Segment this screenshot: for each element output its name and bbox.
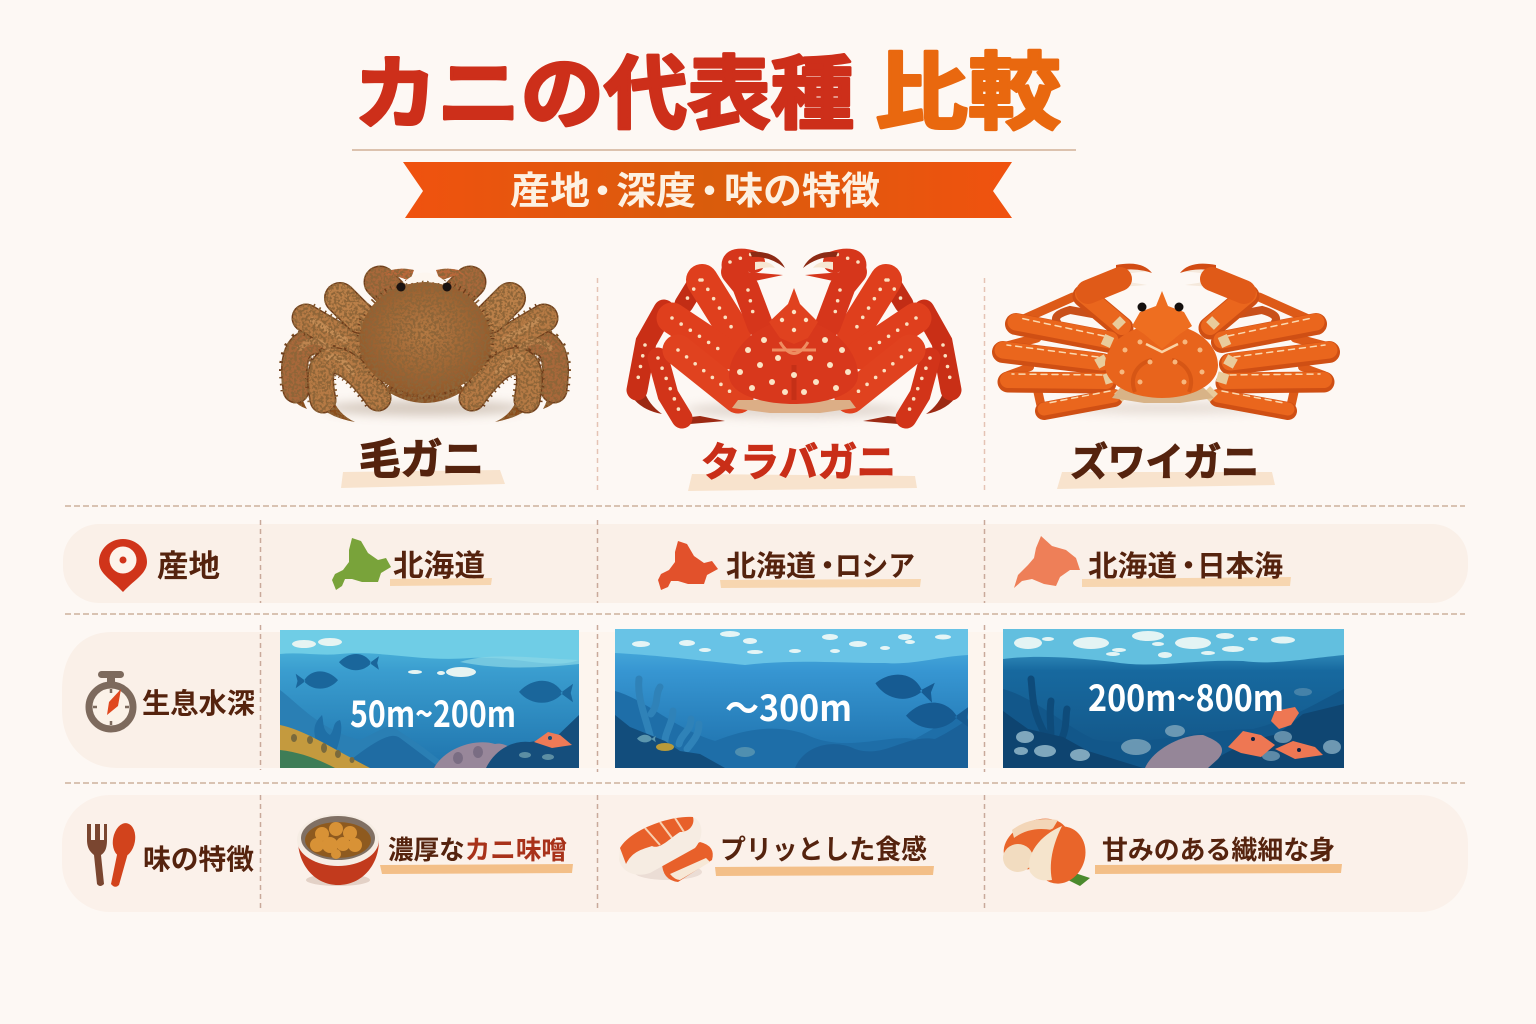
row band: 生息水深	[62, 632, 1003, 768]
origin text: 北海道・日本海	[1082, 550, 1291, 587]
subtitle ribbon: ・	[691, 171, 728, 212]
row band: 産地	[63, 524, 1468, 603]
map: 北海道 green	[332, 538, 391, 590]
map: coral	[1014, 536, 1080, 588]
origin text: 北海道・ロシア: 北海道	[726, 550, 816, 583]
taste text: 濃厚なカニ味噌: 濃厚なカニ味噌	[388, 835, 567, 865]
icon: miso bowl	[297, 814, 379, 886]
crab: 毛ガニ	[288, 269, 562, 422]
taste text: プリッとした食感: プリッとした食感	[720, 835, 927, 865]
origin text: 北海道・ロシア	[720, 550, 921, 588]
subtitle ribbon: 味の特徴	[724, 171, 880, 213]
icon: stopwatch	[89, 671, 133, 729]
map: red	[658, 541, 718, 590]
origin text: 北海道・日本海: 日本海	[1197, 550, 1283, 583]
origin text: 北海道・日本海: ・	[1174, 551, 1203, 583]
crab: タラバガニ	[630, 252, 958, 424]
title: 比較	[875, 26, 1061, 147]
origin text: 北海道・ロシア: ロシア	[835, 551, 915, 583]
subtitle ribbon: 深度	[616, 171, 696, 213]
crab name: ズワイガニ: ズワイガニ	[1070, 442, 1259, 485]
label: 味の特徴: 味の特徴	[143, 844, 254, 875]
depth panel 1: 50m~200m: 50m~200m	[350, 686, 516, 738]
icon: map pin	[99, 539, 147, 592]
crab name: 毛ガニ	[341, 436, 505, 488]
icon: fork and spoon	[87, 821, 138, 887]
taste text: 甘みのある繊細な身: 甘みのある繊細な身	[1102, 835, 1335, 865]
depth panel 3: 200m~800m	[1003, 629, 1344, 768]
crab name: タラバガニ: タラバガニ	[701, 441, 896, 485]
depth panel 2: ~300m: ～300m	[725, 680, 852, 732]
depth panel 3: 200m~800m: 200m~800m	[1088, 670, 1284, 722]
depth panel 1: 50m~200m	[280, 630, 579, 768]
crab name: 毛ガニ: 毛ガニ	[359, 436, 484, 483]
subtitle ribbon: ・	[584, 171, 621, 212]
origin text: 北海道・ロシア: ・	[813, 551, 842, 583]
row band: 味の特徴	[62, 795, 1468, 912]
title	[354, 26, 1061, 147]
subtitle ribbon	[403, 162, 1012, 218]
column dividers top	[598, 278, 984, 492]
depth panel 2: ~300m	[615, 629, 969, 768]
label: 生息水深: 生息水深	[142, 688, 255, 719]
origin text: 北海道: 北海道	[393, 550, 485, 583]
icon: crab meat	[619, 817, 713, 882]
label: 産地: 産地	[157, 549, 220, 584]
icon: crab leg meat	[995, 809, 1093, 891]
title: カニの代表種	[354, 30, 854, 146]
origin text: 北海道・日本海: 北海道	[1088, 550, 1177, 583]
subtitle ribbon: 産地	[510, 171, 590, 213]
crab: ズワイガニ	[1003, 264, 1329, 414]
